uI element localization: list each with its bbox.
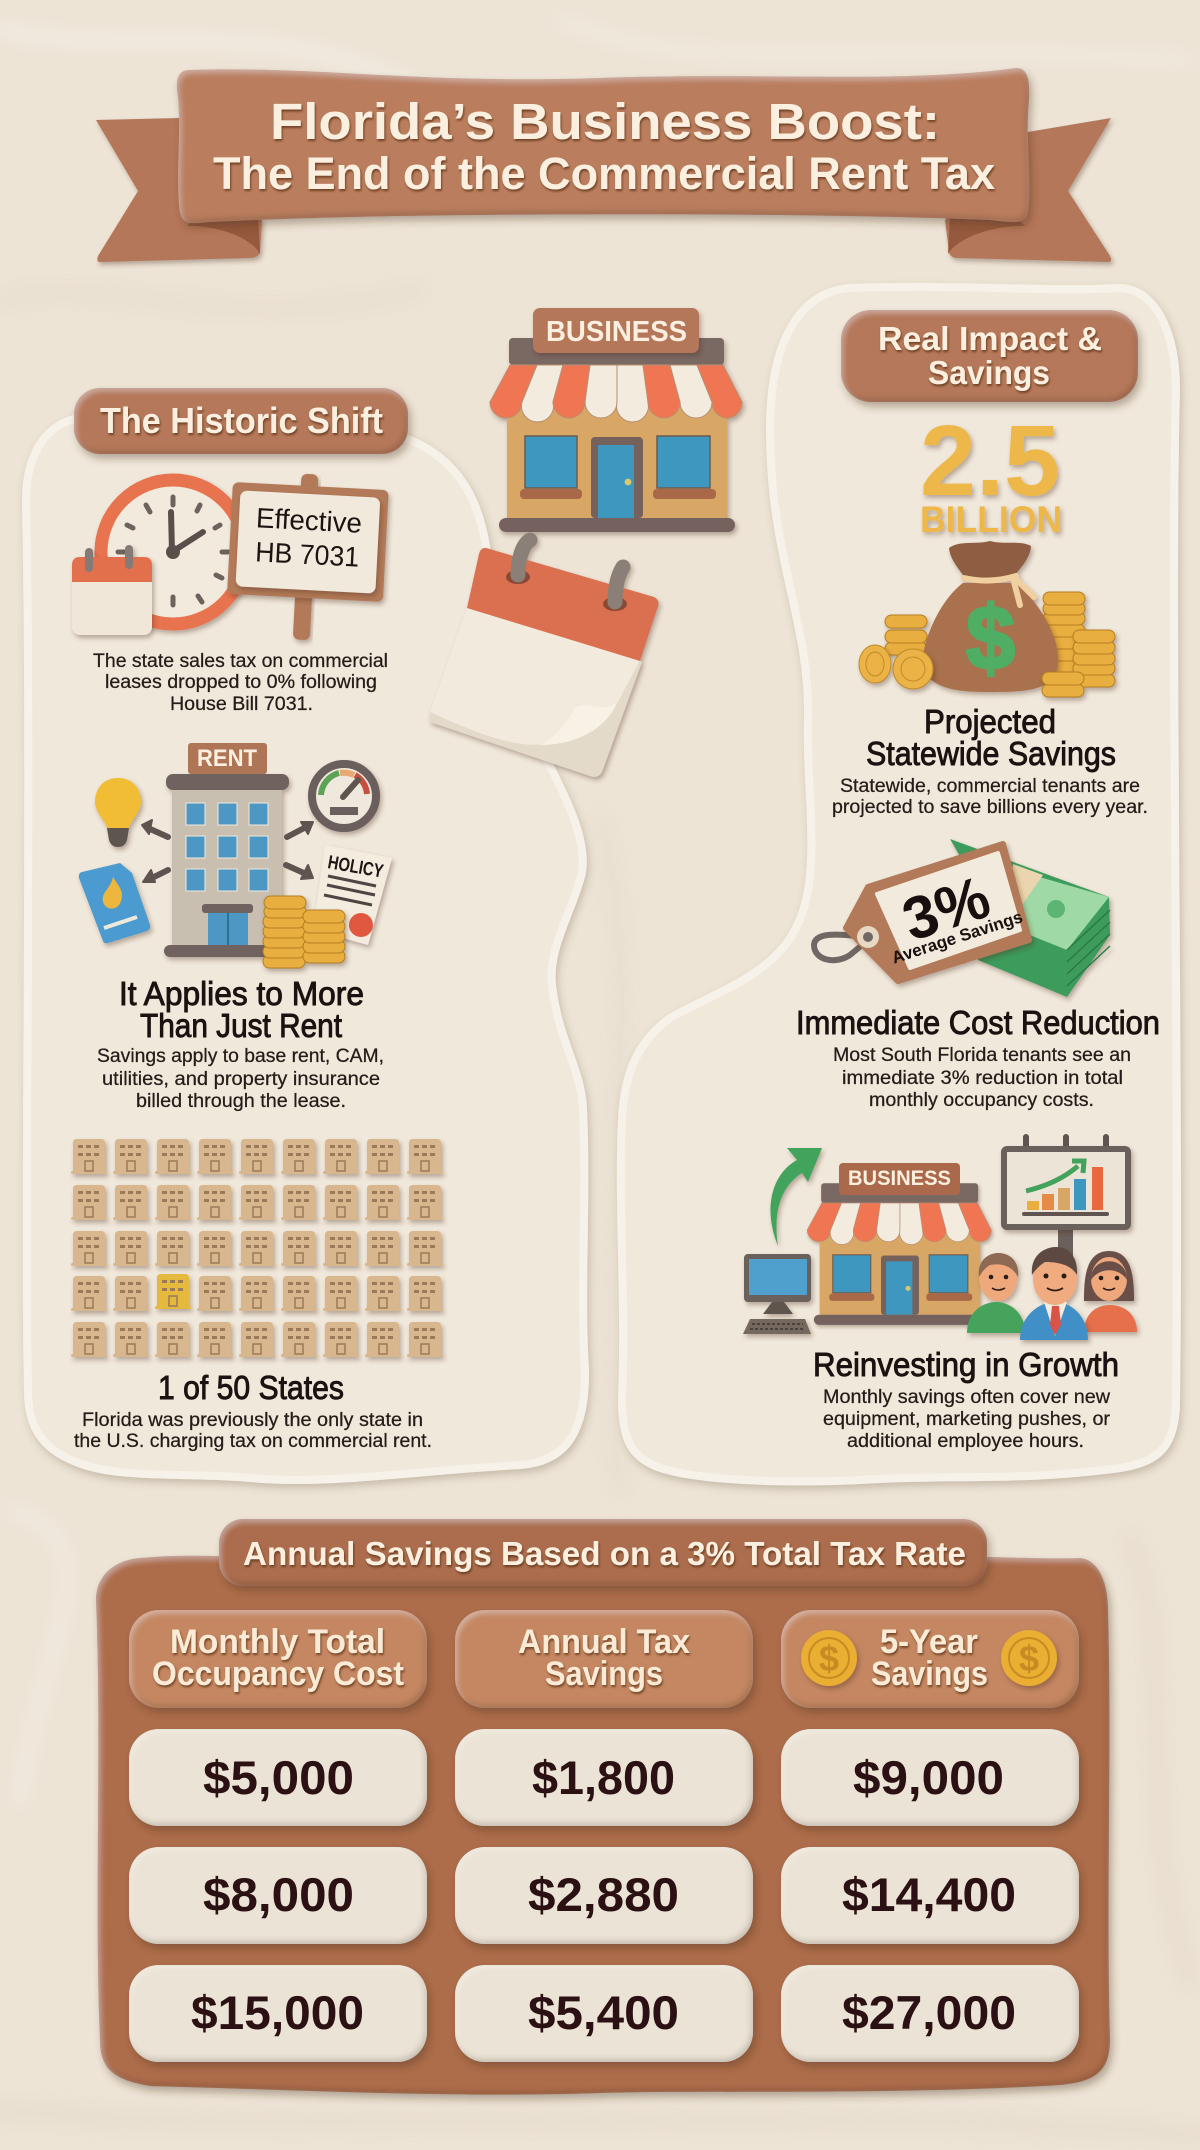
subheading — [119, 975, 364, 1044]
pill label: The Historic Shift — [100, 400, 383, 441]
ribbon tail left — [96, 118, 262, 262]
subheading: It Applies to More — [119, 975, 364, 1012]
icon: insurance policy: HOLICY — [326, 852, 385, 883]
subheading: Projected — [924, 703, 1056, 740]
effective sign — [225, 470, 389, 644]
text block: immediate cost reduction — [796, 1004, 1160, 1111]
icon: 3 percent tag with cash — [814, 839, 1110, 997]
table row: 5,000: $5,000 — [203, 1751, 354, 1804]
text block: sales tax dropped: The state sales tax on commercial — [93, 651, 388, 672]
body: projected to save billions every year. — [832, 797, 1148, 818]
body: immediate 3% reduction in total — [842, 1068, 1123, 1089]
body — [833, 1045, 1131, 1111]
billboard chart — [1004, 1137, 1128, 1258]
growth arrow — [770, 1148, 822, 1246]
column header: monthly total occupancy cost — [129, 1610, 427, 1708]
section pill: the historic shift — [74, 388, 408, 454]
arrows — [142, 820, 313, 882]
title banner — [96, 68, 1111, 262]
back coin stacks — [885, 592, 1085, 673]
string — [814, 935, 868, 960]
title text: The End of the Commercial Rent Tax — [213, 148, 995, 199]
text block: sales tax dropped — [93, 651, 388, 715]
section pill: real impact and savings — [841, 310, 1138, 402]
text block: sales tax dropped: leases dropped to 0% following — [105, 672, 377, 693]
effective sign: HB 7031 — [255, 536, 360, 573]
table row: 5,000 — [129, 1729, 1079, 1826]
icon: coin right — [1001, 1630, 1057, 1686]
ribbon body — [177, 68, 1029, 223]
body: Florida was previously the only state in — [82, 1410, 423, 1431]
icon: large calendar — [430, 540, 658, 777]
panel: left, the historic shift background — [26, 414, 585, 1480]
cash stack — [950, 839, 1110, 997]
icon: light bulb — [95, 778, 141, 847]
table row: 8,000: $8,000 — [203, 1868, 354, 1921]
small calendar — [72, 549, 152, 635]
person: center — [1020, 1247, 1088, 1340]
column header: 5-year savings — [781, 1610, 1079, 1708]
table title: Annual Savings Based on a 3% Total Tax Rate — [243, 1535, 966, 1572]
icon: clock with calendar and effective sign — [72, 470, 389, 644]
clock — [101, 480, 245, 624]
table row: 8,000 — [129, 1847, 1079, 1944]
body — [74, 1410, 432, 1452]
table row: 5,000: $9,000 — [853, 1751, 1004, 1804]
subheading: Than Just Rent — [140, 1007, 342, 1044]
business sign: BUSINESS — [546, 316, 687, 348]
icon: storefront — [490, 308, 742, 532]
body: utilities, and property insurance — [102, 1069, 380, 1090]
body: Statewide, commercial tenants are — [840, 776, 1140, 797]
front coins — [859, 630, 1115, 697]
body: Savings apply to base rent, CAM, — [97, 1046, 384, 1067]
table row: 15,000: $15,000 — [191, 1986, 364, 2039]
price tag: 3% — [895, 863, 998, 954]
subheading: 1 of 50 States — [158, 1369, 344, 1406]
business sign — [533, 308, 699, 353]
icon: blue gas bill — [79, 863, 150, 943]
body: monthly occupancy costs. — [869, 1090, 1094, 1111]
title text: Florida’s Business Boost: — [270, 93, 940, 150]
table row: 15,000: $27,000 — [842, 1986, 1016, 2039]
text block: 1 of 50 states — [74, 1369, 432, 1452]
title text — [213, 93, 995, 199]
icon: reinvesting scene — [743, 1137, 1137, 1340]
stat: 2.5 billion: 2.5 — [920, 405, 1060, 517]
table row: 15,000: $5,400 — [528, 1986, 679, 2039]
text block: projected statewide savings — [832, 703, 1148, 818]
effective sign: Effective — [255, 502, 363, 539]
column header: 5-year savings: 5-Year — [880, 1623, 978, 1661]
icon: rent building with arrows — [79, 743, 392, 968]
body: the U.S. charging tax on commercial rent. — [74, 1431, 432, 1452]
ribbon folds — [187, 213, 1025, 254]
column header: annual tax savings — [455, 1610, 753, 1708]
table row: 8,000: $2,880 — [528, 1868, 679, 1921]
icon: coin right: $ — [1019, 1638, 1039, 1679]
icon grid: 45 buildings with Florida highlighted — [71, 1139, 443, 1357]
ribbon tail right — [945, 118, 1111, 262]
body — [823, 1387, 1111, 1452]
column header: annual tax savings: Savings — [545, 1655, 663, 1693]
text block: reinvesting in growth — [813, 1346, 1119, 1452]
price tag — [846, 844, 1029, 981]
icon: gauge — [312, 764, 376, 828]
table row: 15,000 — [129, 1965, 1079, 2062]
bag — [923, 541, 1058, 692]
body: equipment, marketing pushes, or — [823, 1409, 1111, 1430]
text block: applies to more than rent — [97, 975, 384, 1112]
pill label — [878, 320, 1102, 391]
column header: monthly total occupancy cost: Occupancy Cost — [152, 1655, 404, 1693]
small storefront — [807, 1163, 991, 1325]
column header: annual tax savings: Annual Tax — [518, 1623, 690, 1661]
icon: coin left — [801, 1630, 857, 1686]
icon: money bag and coins — [859, 541, 1115, 697]
body — [832, 776, 1148, 818]
building — [164, 774, 289, 957]
price tag: Average Savings — [889, 907, 1025, 968]
person: left — [967, 1253, 1025, 1333]
pill label: Savings — [928, 354, 1050, 391]
stat: 2.5 billion: BILLION — [920, 499, 1062, 540]
body: billed through the lease. — [136, 1091, 346, 1112]
bag: $ — [966, 589, 1015, 689]
computer — [743, 1254, 811, 1334]
icon: coin left: $ — [819, 1638, 839, 1679]
subheading — [866, 703, 1116, 772]
icon: coin stacks — [263, 896, 345, 968]
body — [97, 1046, 384, 1112]
column header: monthly total occupancy cost: Monthly Total — [170, 1623, 385, 1661]
rent sign: RENT — [197, 745, 257, 772]
table row: 8,000: $14,400 — [842, 1868, 1016, 1921]
body: Monthly savings often cover new — [823, 1387, 1110, 1408]
table title — [219, 1519, 987, 1586]
panel: annual savings table — [96, 1519, 1110, 2095]
panel: right, real impact and savings background — [621, 287, 1177, 1481]
table board — [96, 1556, 1110, 2095]
subheading: Statewide Savings — [866, 735, 1116, 772]
column header: 5-year savings: Savings — [871, 1655, 988, 1693]
subheading: Immediate Cost Reduction — [796, 1004, 1160, 1041]
person: right — [1084, 1251, 1137, 1332]
table row: 5,000: $1,800 — [532, 1751, 675, 1804]
text block: sales tax dropped: House Bill 7031. — [170, 694, 313, 715]
pill label: Real Impact & — [878, 320, 1102, 357]
icon: insurance policy — [313, 845, 392, 945]
body: additional employee hours. — [847, 1431, 1084, 1452]
body: Most South Florida tenants see an — [833, 1045, 1131, 1066]
subheading: Reinvesting in Growth — [813, 1346, 1119, 1383]
small storefront: BUSINESS — [848, 1167, 951, 1190]
